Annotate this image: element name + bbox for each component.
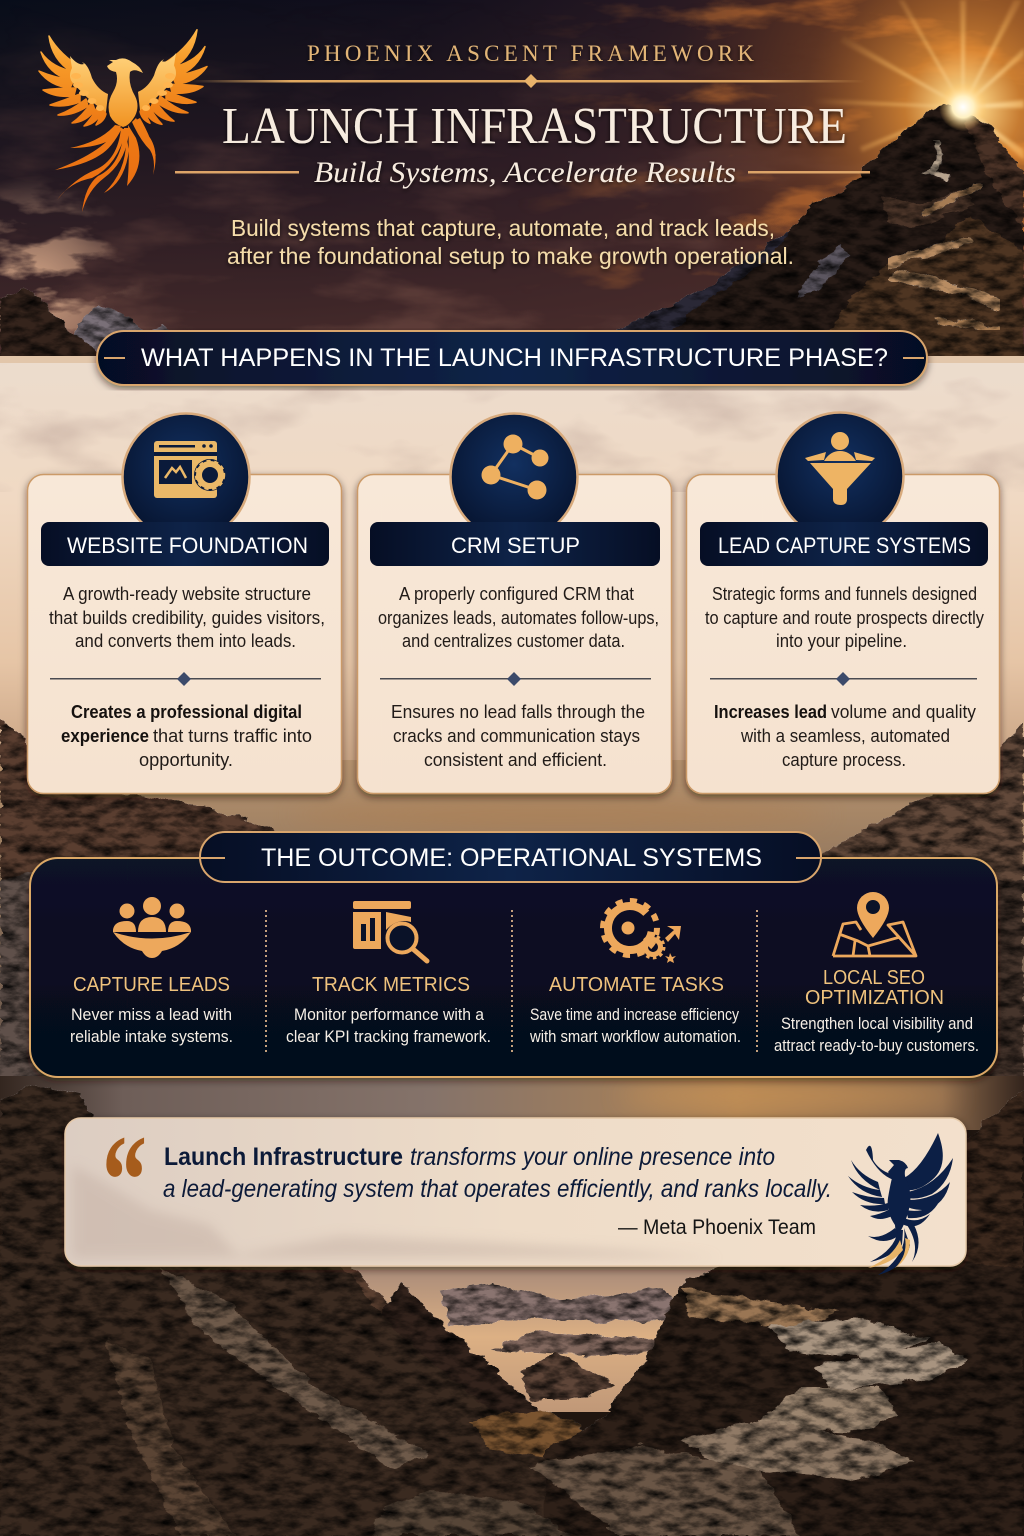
icon: crm network [482, 434, 548, 500]
icon: map pin [833, 892, 916, 956]
outcome banner [200, 832, 821, 882]
card benefit: volume and quality [831, 701, 977, 722]
outcome: capture leads: reliable intake systems. [70, 1028, 233, 1046]
outcome: capture leads [70, 897, 233, 1046]
card description: that builds credibility, guides visitors, [49, 607, 325, 628]
panel: crm setup [358, 414, 672, 794]
panel: the outcome [30, 832, 997, 1077]
card benefit: Ensures no lead falls through the [391, 701, 645, 722]
card description: Strategic forms and funnels designed [712, 583, 977, 604]
card description: to capture and route prospects directly [705, 607, 985, 628]
intro text: Build systems that capture, automate, and track leads, [231, 215, 775, 241]
outcome: track metrics: TRACK METRICS [312, 974, 470, 996]
outcome banner: THE OUTCOME: OPERATIONAL SYSTEMS [261, 844, 762, 872]
card benefit: experience [61, 725, 149, 746]
header divider [190, 74, 865, 88]
outcome: track metrics: Monitor performance with a [294, 1006, 485, 1024]
outcome: track metrics: clear KPI tracking framework. [286, 1028, 491, 1046]
outcome: capture leads: CAPTURE LEADS [73, 974, 230, 996]
intro text: after the foundational setup to make growth operational. [227, 243, 794, 269]
icon: website gear [154, 441, 226, 498]
outcome: automate tasks [529, 901, 741, 1046]
logo: orange phoenix [39, 30, 207, 212]
icon: gears arrow [603, 901, 681, 963]
icon: lead funnel [805, 432, 875, 505]
outcome: local seo: LOCAL SEO [823, 967, 925, 989]
icon: people funnel [113, 897, 191, 958]
outcome: local seo: Strengthen local visibility and [781, 1015, 973, 1033]
card description: and centralizes customer data. [402, 630, 625, 651]
mid landscape [0, 760, 1024, 1110]
outcome: automate tasks: Save time and increase efficiency [530, 1006, 740, 1024]
quote text: transforms your online presence into [410, 1143, 775, 1171]
canyon [0, 1130, 1024, 1536]
quote text [163, 1143, 832, 1203]
card heading: WEBSITE FOUNDATION [67, 533, 308, 558]
card description [378, 583, 659, 651]
title: LAUNCH INFRASTRUCTURE [222, 98, 847, 155]
intro text [227, 215, 794, 269]
card heading [700, 522, 988, 566]
dotted separators [266, 910, 757, 1052]
faded mountain in quote [72, 1165, 720, 1258]
quote mark: “ [102, 1109, 147, 1253]
card benefit [714, 701, 977, 770]
card benefit: consistent and efficient. [424, 749, 607, 770]
subtitle: Build Systems, Accelerate Results [314, 156, 736, 189]
card benefit [391, 701, 645, 770]
card benefit [61, 701, 312, 770]
card benefit: cracks and communication stays [393, 725, 640, 746]
parchment band [0, 362, 1024, 762]
card description: into your pipeline. [776, 630, 907, 651]
outcome: capture leads: Never miss a lead with [71, 1006, 232, 1024]
card description: and converts them into leads. [75, 630, 296, 651]
card heading [370, 522, 660, 566]
outcome: local seo [774, 892, 979, 1055]
card description [705, 583, 985, 651]
card description: A properly configured CRM that [399, 583, 634, 604]
card description: A growth-ready website structure [63, 583, 311, 604]
panel: website foundation [28, 414, 342, 794]
quote attribution: — Meta Phoenix Team [618, 1216, 816, 1239]
card benefit: with a seamless, automated [740, 725, 950, 746]
card benefit: that turns traffic into [153, 725, 312, 746]
quote text: Launch Infrastructure [164, 1143, 403, 1171]
outcome: track metrics [286, 901, 491, 1046]
outcome: automate tasks: with smart workflow automation. [529, 1028, 741, 1046]
card divider [50, 672, 321, 686]
panel: lead capture systems [686, 412, 1000, 794]
card description: organizes leads, automates follow-ups, [378, 607, 659, 628]
section banner: what happens: WHAT HAPPENS IN THE LAUNCH INFRASTRUCTURE PHASE? [141, 344, 888, 372]
card heading: LEAD CAPTURE SYSTEMS [718, 533, 971, 558]
card description [49, 583, 325, 651]
far ridges [0, 104, 1024, 362]
icon: chart magnifier [353, 901, 427, 961]
card benefit: Creates a professional digital [71, 701, 302, 722]
quote text: a lead-generating system that operates efficiently, and ranks locally. [163, 1175, 832, 1203]
card divider [380, 672, 651, 686]
outcome: local seo: OPTIMIZATION [805, 987, 944, 1009]
card heading [41, 522, 329, 566]
icon: navy phoenix [848, 1133, 953, 1275]
card divider [710, 672, 977, 686]
eyebrow: PHOENIX ASCENT FRAMEWORK [307, 41, 754, 66]
panel: testimonial quote [65, 1109, 966, 1275]
section banner: what happens [97, 331, 927, 385]
outcome: automate tasks: AUTOMATE TASKS [549, 974, 724, 996]
card heading: CRM SETUP [451, 533, 580, 558]
card benefit: Increases lead [714, 701, 827, 722]
card benefit: opportunity. [139, 749, 233, 770]
outcome: local seo: attract ready-to-buy customers. [774, 1037, 979, 1055]
sun core [939, 83, 987, 131]
card benefit: capture process. [782, 749, 906, 770]
